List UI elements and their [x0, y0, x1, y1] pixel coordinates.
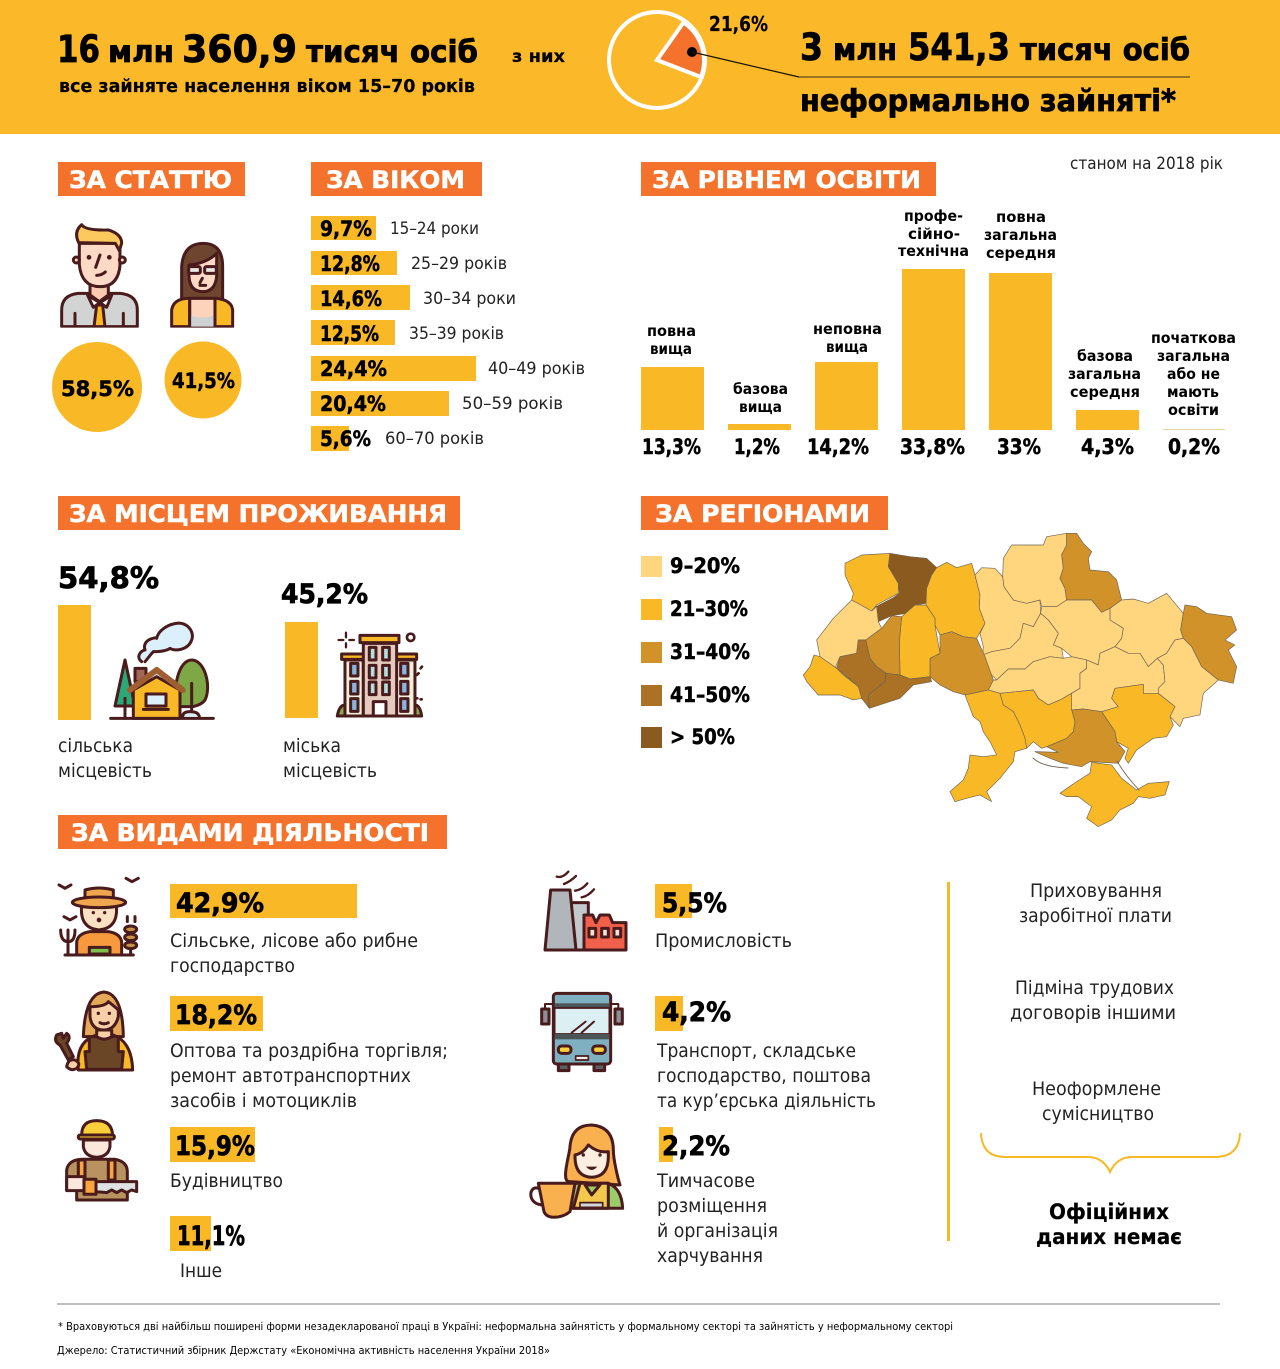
date note: станом на 2018 рік: [1070, 154, 1223, 174]
total employed figure: 360,9: [182, 28, 297, 71]
activity: transport: [655, 996, 876, 1112]
urban share: місцевість: [283, 760, 377, 782]
age 60-70: 5,6%: [320, 427, 371, 451]
pie chart 21.6%: [609, 12, 1190, 108]
incomplete higher: [807, 320, 882, 459]
age 30-34: 30–34 роки: [423, 289, 516, 309]
vocational: профе-: [904, 207, 963, 225]
incomplete higher: 14,2%: [807, 435, 869, 459]
age 35-39: [311, 320, 504, 346]
legend over 50%: > 50%: [670, 725, 735, 749]
activity: transport: господарство, поштова: [657, 1065, 871, 1087]
vocational: 33,8%: [900, 435, 965, 459]
total employed figure: млн: [108, 35, 174, 70]
legend 9-20%: [641, 554, 740, 578]
informally employed figure: [800, 26, 1190, 69]
primary or none: [1151, 329, 1236, 459]
incomplete higher: неповна: [813, 320, 882, 338]
legend over 50%: [641, 725, 735, 749]
vocational: технічна: [898, 242, 969, 260]
icon: shop worker with wrench: [56, 992, 133, 1070]
age chart: [311, 216, 585, 451]
complete general secondary: повна: [996, 208, 1046, 226]
vocational: сійно-: [908, 225, 960, 243]
activity: hospitality: розміщення: [657, 1195, 767, 1217]
activity: hospitality: й організація: [657, 1220, 778, 1242]
informally employed figure: 3: [800, 26, 823, 69]
complete general secondary: середня: [986, 244, 1056, 262]
icon: farmer: [59, 878, 138, 955]
icon: hospitality worker: [531, 1125, 623, 1217]
map of Ukraine by region: [803, 533, 1237, 827]
activity: agriculture: Сільське, лісове або рибне: [170, 930, 418, 952]
legend 41-50%: [641, 683, 750, 707]
icon: factory: [545, 872, 626, 950]
icon: construction worker: [67, 1121, 137, 1200]
source: Джерело: Статистичний збірник Держстату «Економічна активність населення України 2018»: [57, 1344, 550, 1357]
legend 31-40%: 31–40%: [670, 640, 750, 664]
pie label: 21,6%: [709, 12, 768, 36]
legend 9-20%: 9–20%: [670, 554, 740, 578]
no official data conclusion: Офіційних: [1049, 1200, 1169, 1224]
complete general secondary: загальна: [984, 226, 1057, 244]
no official data conclusion: даних немає: [1036, 1225, 1182, 1249]
age 40-49: 24,4%: [320, 357, 387, 381]
urban share: міська: [283, 735, 341, 757]
complete higher: вища: [650, 340, 692, 358]
age 50-59: 50–59 років: [462, 394, 563, 414]
header banner: [0, 0, 1280, 134]
activity: industry: [655, 884, 792, 952]
activity: agriculture: 42,9%: [176, 888, 264, 919]
age 40-49: 40–49 років: [488, 359, 585, 379]
male share: 58,5%: [61, 377, 134, 401]
activity: hospitality: харчування: [657, 1245, 763, 1267]
vocational: [898, 207, 969, 459]
total employed figure: 16: [57, 28, 100, 71]
complete higher: повна: [647, 322, 696, 340]
legend 21-30%: 21–30%: [670, 597, 748, 621]
heading: by sex: ЗА СТАТТЮ: [69, 166, 232, 194]
age 50-59: 20,4%: [320, 392, 386, 416]
primary or none: освіти: [1168, 401, 1219, 419]
legend 21-30%: [641, 597, 748, 621]
age 25-29: 12,8%: [320, 252, 380, 276]
primary or none: загальна: [1157, 347, 1230, 365]
age 35-39: 35–39 років: [409, 324, 504, 344]
basic general secondary: загальна: [1068, 365, 1141, 383]
informally employed figure: 541,3: [908, 26, 1010, 69]
heading: by region: [641, 496, 888, 530]
note: hidden wages: заробітної плати: [1019, 905, 1172, 927]
complete higher: [641, 322, 704, 459]
age 60-70: 60–70 років: [385, 429, 484, 449]
age 60-70: [311, 426, 484, 451]
primary or none: мають: [1167, 383, 1219, 401]
activity: trade: Оптова та роздрібна торгівля;: [170, 1040, 448, 1062]
age 30-34: 14,6%: [320, 287, 382, 311]
activity: agriculture: [170, 884, 418, 977]
urban share: [281, 579, 377, 782]
female share: 41,5%: [172, 369, 235, 393]
icon: bus: [542, 993, 622, 1071]
note: undeclared second job: сумісництво: [1042, 1103, 1154, 1125]
urban share: 45,2%: [281, 579, 368, 610]
activity: agriculture: господарство: [170, 955, 295, 977]
heading: by sex: [58, 162, 245, 196]
age 30-34: [311, 285, 516, 311]
legend 31-40%: [641, 640, 750, 664]
age 25-29: 25–29 років: [411, 254, 507, 274]
age 15-24: [311, 216, 479, 241]
activity: transport: Транспорт, складське: [656, 1040, 856, 1062]
note: contract substitution: Підміна трудових: [1015, 977, 1174, 999]
activity: industry: 5,5%: [662, 888, 727, 919]
rural share: [58, 561, 159, 782]
brace: [981, 1133, 1240, 1172]
total employed caption: все зайняте населення віком 15–70 років: [59, 76, 475, 97]
basic general secondary: середня: [1070, 383, 1140, 401]
education bar chart: [641, 207, 1236, 459]
activity: trade: ремонт автотранспортних: [170, 1065, 411, 1087]
heading: by age: [311, 162, 482, 196]
activity: hospitality: 2,2%: [662, 1131, 730, 1162]
heading: by age: ЗА ВІКОМ: [326, 166, 465, 194]
activity: transport: та кур’єрська діяльність: [657, 1090, 876, 1112]
age 25-29: [311, 251, 507, 276]
age 15-24: 15–24 роки: [390, 219, 479, 239]
activity: trade: 18,2%: [175, 1000, 257, 1031]
activity: other: 11,1%: [177, 1221, 245, 1252]
note: undeclared second job: Неоформлене: [1032, 1078, 1161, 1100]
basic general secondary: [1068, 347, 1141, 459]
heading: by region: ЗА РЕГІОНАМИ: [655, 500, 870, 528]
primary or none: початкова: [1151, 329, 1236, 347]
activity: hospitality: Тимчасове: [656, 1170, 755, 1192]
female share: [164, 342, 242, 418]
informally employed figure: млн: [833, 33, 897, 68]
activity: transport: 4,2%: [662, 997, 731, 1028]
activity: construction: [170, 1127, 283, 1192]
complete general secondary: [984, 208, 1057, 459]
basic general secondary: базова: [1077, 347, 1133, 365]
informally employed caption: неформально зайняті*: [800, 84, 1176, 119]
heading: by education: ЗА РІВНЕМ ОСВІТИ: [652, 166, 921, 194]
icon: rural house: [111, 623, 213, 718]
complete higher: 13,3%: [642, 435, 701, 459]
heading: by residence: ЗА МІСЦЕМ ПРОЖИВАННЯ: [69, 500, 447, 528]
age 15-24: 9,7%: [320, 217, 372, 241]
age 35-39: 12,5%: [320, 322, 379, 346]
basic higher: базова: [733, 380, 788, 398]
activity: trade: засобів і мотоциклів: [170, 1090, 357, 1112]
note: undeclared second job: [1032, 1078, 1161, 1125]
no official data conclusion: [1036, 1200, 1182, 1249]
activity: construction: 15,9%: [175, 1131, 255, 1162]
primary or none: або не: [1167, 365, 1220, 383]
basic higher: вища: [739, 398, 782, 416]
icon: woman: [169, 243, 235, 333]
connector text: з них: [512, 47, 565, 67]
activity: industry: Промисловість: [655, 930, 792, 952]
activity: construction: Будівництво: [170, 1170, 283, 1192]
icon: urban building: [337, 633, 422, 716]
basic higher: [728, 380, 791, 459]
legend 41-50%: 41–50%: [670, 683, 750, 707]
note: hidden wages: [1019, 880, 1172, 927]
Arabat spit and Azov spit on the map: [1033, 758, 1139, 790]
activity: other: Інше: [180, 1260, 222, 1282]
incomplete higher: вища: [826, 338, 868, 356]
total employed figure: тисяч осіб: [306, 35, 478, 70]
informally employed figure: тисяч осіб: [1020, 33, 1190, 68]
map legend: [641, 554, 750, 749]
rural share: місцевість: [58, 760, 152, 782]
total employed figure: [57, 28, 478, 71]
heading: by economic activity: ЗА ВИДАМИ ДІЯЛЬНОСТІ: [71, 819, 429, 847]
activity: trade: [170, 996, 448, 1112]
primary or none: 0,2%: [1168, 435, 1220, 459]
footnote: * Враховуються дві найбільш поширені форми незадекларованої праці в Україні: неформальна зайнятість у формальному секторі та зайнятість у неформальному секторі: [58, 1320, 953, 1333]
rural share: сільська: [58, 735, 133, 757]
basic higher: 1,2%: [734, 435, 780, 459]
activity: other: [170, 1216, 245, 1282]
note: contract substitution: договорів іншими: [1010, 1002, 1176, 1024]
icon: man: [59, 225, 139, 333]
rural share: 54,8%: [58, 561, 159, 595]
note: contract substitution: [1010, 977, 1176, 1024]
note: hidden wages: Приховування: [1030, 880, 1162, 902]
age 50-59: [311, 391, 563, 416]
age 40-49: [311, 356, 585, 381]
male share: [52, 342, 142, 432]
basic general secondary: 4,3%: [1081, 435, 1134, 459]
activity: hospitality: [656, 1127, 778, 1267]
complete general secondary: 33%: [997, 435, 1041, 459]
